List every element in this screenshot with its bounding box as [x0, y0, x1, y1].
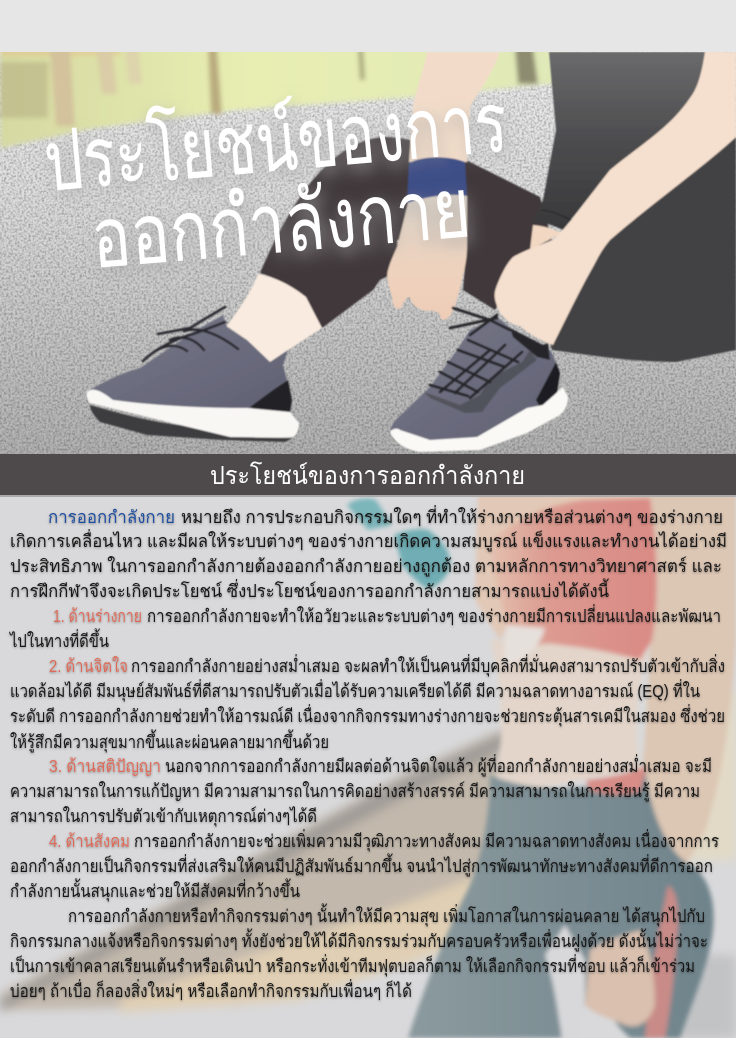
- benefit 4: social: กำลังกายนั้นสนุกและช่วยให้มีสังคมที่กว้างขึ้น: [10, 878, 300, 902]
- benefit 3: intellect: 3. ด้านสติปัญญา: [49, 756, 161, 776]
- main title: [40, 75, 511, 286]
- torso and thigh, dark: [550, 136, 736, 363]
- black sleeve: [533, 52, 705, 230]
- title line 1: ประโยชน์ของการ: [40, 75, 511, 209]
- benefit 1: physical: [8, 604, 721, 651]
- black legging: knee and thigh: [260, 137, 552, 328]
- benefit 4: social: [10, 829, 719, 902]
- benefit 3: intellect: สามารถในการปรับตัวเข้ากับเหตุการณ์ต่างๆได้ดี: [10, 806, 317, 827]
- woman figure: [347, 490, 736, 1038]
- benefit 2: mental: ให้รู้สึกมีความสุขมากขึ้นและผ่อนคลายมากขึ้นด้วย: [10, 729, 329, 753]
- hand: [585, 930, 655, 1026]
- light backdrop: [0, 495, 736, 1038]
- left running shoe: [87, 307, 299, 442]
- introduction paragraph: [10, 505, 727, 601]
- benefit 3: intellect: [10, 754, 712, 827]
- benefit 2: mental: [10, 654, 725, 753]
- grey leggings: [408, 768, 714, 1038]
- white gap at underarm: [504, 625, 545, 665]
- title line 2: ออกกำลังกาย: [88, 160, 474, 286]
- navy sweatband: [407, 157, 467, 203]
- introduction paragraph: การออกกำลังกาย: [48, 507, 175, 527]
- benefit 4: social: 4. ด้านสังคม: [49, 831, 130, 851]
- lower background photo: woman exercising: [0, 490, 736, 1038]
- section heading text: ประโยชน์ของการออกกำลังกาย: [210, 461, 525, 490]
- right arm and hand: [495, 52, 736, 345]
- introduction paragraph: หมายถึง การประกอบกิจกรรมใดๆ ที่ทำให้ร่างกายหรือส่วนต่างๆ ของร่างกาย: [181, 505, 723, 527]
- red sports top: [492, 498, 656, 662]
- road surface: [0, 52, 736, 454]
- benefit 1: physical: 1. ด้านร่างกาย: [53, 606, 142, 626]
- closing paragraph: บ่อยๆ ถ้าเบื่อ ก็ลองสิ่งใหม่ๆ หรือเลือกทำกิจกรรมกับเพื่อนๆ ก็ได้: [10, 979, 412, 1001]
- section heading band: [0, 454, 736, 495]
- sleeve cuff line: [541, 210, 573, 222]
- closing paragraph: [10, 903, 708, 1001]
- left shin: [227, 274, 322, 362]
- left hand: [387, 195, 467, 320]
- right running shoe: [390, 308, 568, 452]
- park background: [0, 40, 570, 148]
- raised forearm: [409, 52, 500, 162]
- top margin band: [0, 0, 736, 52]
- introduction paragraph: ประสิทธิภาพ ในการออกกำลังกายต้องออกกำลังกายอย่างถูกต้อง ตามหลักการทางวิทยาศาสตร์ และ: [10, 556, 722, 577]
- benefit 1: physical: ไปในทางที่ดีขึ้น: [8, 628, 109, 651]
- pink waistband: [586, 765, 647, 795]
- hero photo: person tying running shoes: [0, 40, 736, 454]
- arm and shoulder: [639, 497, 736, 863]
- benefit 2: mental: 2. ด้านจิตใจ: [49, 656, 128, 676]
- introduction paragraph: การฝึกกีฬาจึงจะเกิดประโยชน์ ซึ่งประโยชน์ของการออกกำลังกายสามารถแบ่งได้ดังนี้: [10, 578, 609, 601]
- gap between legs: [545, 925, 585, 1038]
- skin under cuff: [530, 225, 562, 250]
- dumbbell: [347, 498, 392, 530]
- midriff: [490, 640, 650, 795]
- neck and raised arm skin: [474, 497, 622, 640]
- person: legs, arms and shoes: [87, 52, 736, 452]
- blurred diagonal bench: [0, 690, 736, 1038]
- body text: [8, 505, 727, 1001]
- red leggings stripe: [645, 885, 678, 1038]
